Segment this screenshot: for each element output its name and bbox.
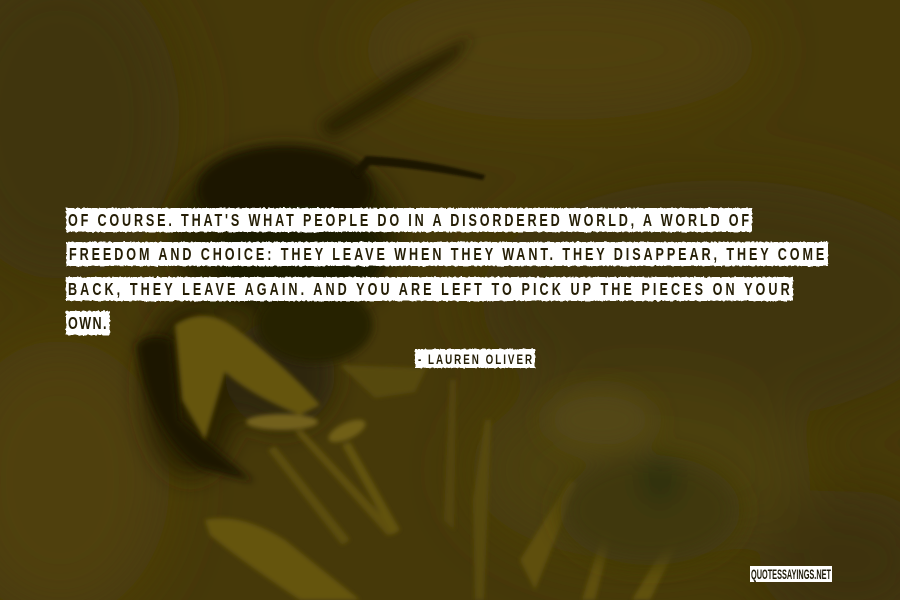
background: yellow flower petals and stamens	[175, 316, 687, 600]
background: flower centre	[545, 388, 740, 565]
quote line 1: OF COURSE. THAT'S WHAT PEOPLE DO IN A DISORDERED WORLD, A WORLD OF	[68, 211, 749, 231]
watermark: QUOTESSAYINGS.NET	[751, 566, 831, 582]
watermark	[750, 566, 832, 582]
quote line 4: OWN.	[68, 314, 106, 334]
background: blurred bee wing	[318, 36, 472, 138]
author attribution: - LAUREN OLIVER	[418, 351, 532, 367]
quote line 3: BACK, THEY LEAVE AGAIN. AND YOU ARE LEFT TO PICK UP THE PIECES ON YOUR	[68, 280, 790, 300]
bee antenna	[352, 156, 485, 180]
quote line 2: FREEDOM AND CHOICE: THEY LEAVE WHEN THEY WANT. THEY DISAPPEAR, THEY COME	[69, 245, 824, 265]
background: bee body	[136, 146, 400, 482]
quote text strips	[66, 208, 828, 335]
